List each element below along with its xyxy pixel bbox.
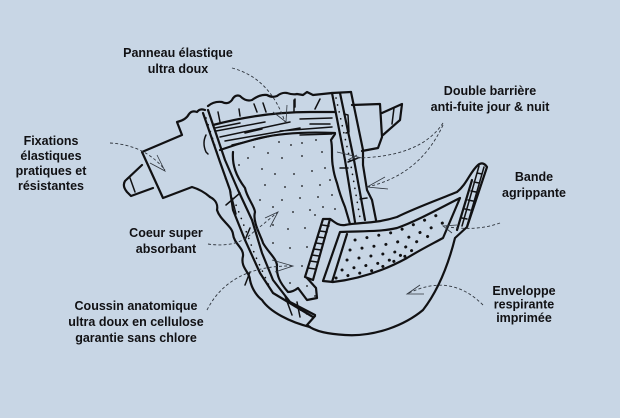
- arrow: absorbent core: [208, 212, 278, 245]
- arrow: envelope: [407, 285, 483, 305]
- left wing with fastening tab: [124, 109, 310, 327]
- elastic waist panel: [213, 99, 335, 150]
- label: adhesive band: Bande: [515, 170, 553, 184]
- arrow: elastic panel: [232, 68, 287, 122]
- right wing with tab: [352, 104, 402, 151]
- label: fastenings: résistantes: [18, 179, 84, 193]
- right inner wavy edge: [331, 134, 350, 224]
- label: elastic panel: Panneau élastique: [123, 46, 233, 60]
- label: double barrier: anti-fuite jour & nuit: [431, 100, 550, 114]
- label: cushion: Coussin anatomique: [75, 299, 197, 313]
- adhesive band: [323, 166, 484, 282]
- label: absorbent core: absorbant: [136, 242, 197, 256]
- arrow: double barrier upper: [337, 123, 443, 160]
- label: envelope: respirante: [494, 298, 554, 312]
- band hook dots: [336, 214, 445, 278]
- absorbent core dots: [238, 139, 336, 297]
- label: adhesive band: agrippante: [502, 186, 566, 200]
- label: fastenings: élastiques: [20, 149, 82, 163]
- arrow: cushion: [207, 260, 293, 310]
- arrow: double barrier lower: [367, 125, 443, 189]
- label: envelope: Enveloppe: [492, 284, 556, 298]
- left dotted strip: [203, 110, 315, 317]
- label: envelope: imprimée: [496, 311, 552, 325]
- arrow: adhesive band: [443, 223, 500, 233]
- label: cushion: ultra doux en cellulose: [68, 315, 204, 329]
- ladder strip: [305, 219, 330, 280]
- diaper illustration: [124, 92, 487, 335]
- label: absorbent core: Coeur super: [129, 226, 203, 240]
- label: fastenings: pratiques et: [16, 164, 87, 178]
- front panel outer envelope: [307, 163, 487, 335]
- top ruffle: [208, 92, 351, 106]
- right dotted strip: [332, 92, 376, 222]
- arrow: fastenings: [110, 143, 165, 171]
- label: elastic panel: ultra doux: [148, 62, 208, 76]
- left inner wavy edge: [233, 152, 317, 300]
- label: cushion: garantie sans chlore: [75, 331, 197, 345]
- label: fastenings: Fixations: [24, 134, 78, 148]
- label: double barrier: Double barrière: [444, 84, 536, 98]
